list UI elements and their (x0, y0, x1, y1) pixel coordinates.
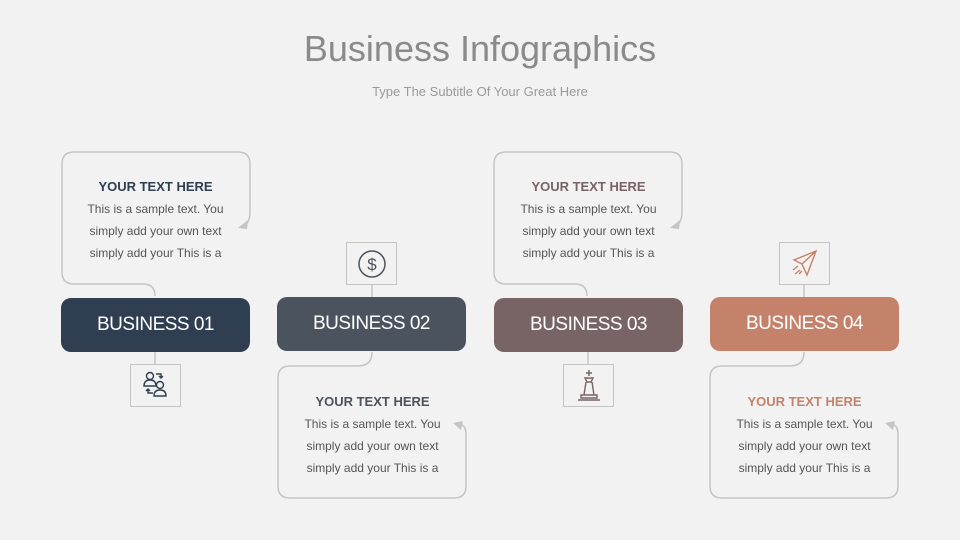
text block 2: simply add your own text (306, 439, 439, 453)
text block 3: simply add your own text (522, 224, 655, 238)
panel: business 04 (710, 297, 899, 351)
panel: business 02: BUSINESS 02 (313, 313, 430, 334)
icon: paper plane (779, 242, 830, 285)
panel: business 02 (277, 297, 466, 351)
icon: people exchange (130, 364, 181, 407)
text block 2: simply add your This is a (307, 461, 438, 475)
text block 3: YOUR TEXT HERE (531, 179, 646, 194)
text block 1: This is a sample text. You (87, 202, 224, 216)
text block 4 (736, 394, 873, 475)
icon: dollar coin (346, 242, 397, 285)
text block 4: simply add your This is a (739, 461, 870, 475)
text block 1: simply add your This is a (90, 246, 221, 260)
panel: business 01 (61, 298, 250, 352)
panel: business 04: BUSINESS 04 (746, 313, 863, 334)
text block 2 (304, 394, 441, 475)
text block 3: This is a sample text. You (520, 202, 657, 216)
text block 3: simply add your This is a (523, 246, 654, 260)
text block 3 (520, 179, 657, 260)
panel: business 03 (494, 298, 683, 352)
title: Business Infographics (304, 28, 656, 69)
text block 2: YOUR TEXT HERE (315, 394, 430, 409)
text block 1 (87, 179, 224, 260)
text block 1: YOUR TEXT HERE (98, 179, 213, 194)
text block 2: This is a sample text. You (304, 417, 441, 431)
text block 4: simply add your own text (738, 439, 871, 453)
icon: dollar coin: $ (367, 255, 377, 274)
icon: chess king (563, 364, 614, 407)
text block 4: YOUR TEXT HERE (747, 394, 862, 409)
subtitle: Type The Subtitle Of Your Great Here (372, 84, 588, 99)
text block 1: simply add your own text (89, 224, 222, 238)
text block 4: This is a sample text. You (736, 417, 873, 431)
panel: business 03: BUSINESS 03 (530, 314, 647, 335)
panel: business 01: BUSINESS 01 (97, 314, 214, 335)
